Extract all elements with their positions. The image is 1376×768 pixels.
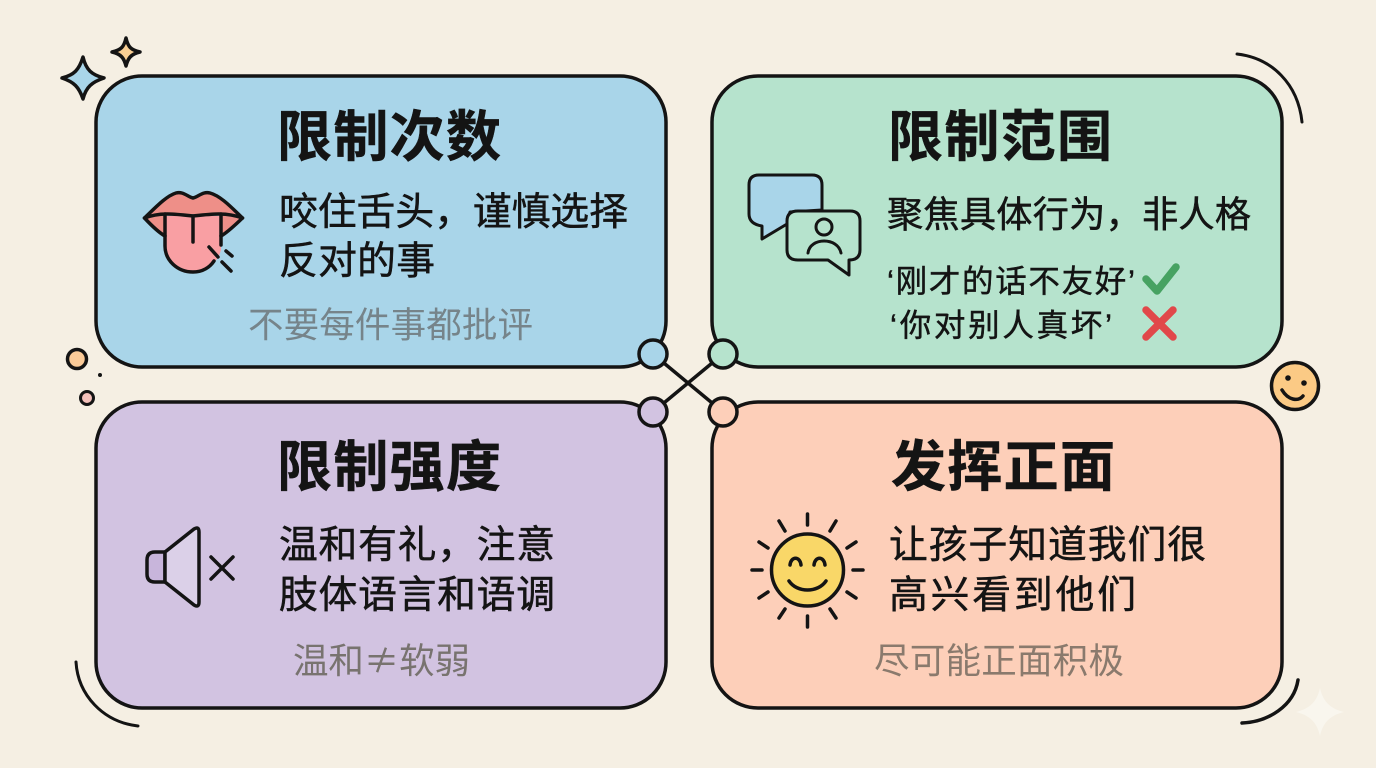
panel: 限制次数 (96, 76, 666, 367)
decoration: smiley (1272, 362, 1318, 410)
body text (279, 191, 628, 283)
heading: 限制范围: 限制范围 (888, 106, 1112, 168)
body text: 聚焦具体行为，非人格 (887, 194, 1251, 235)
panel: 限制强度 (96, 402, 666, 708)
decoration: orange sparkle (112, 38, 140, 66)
body text: 温和有礼，注意 (279, 524, 555, 567)
body text: 反对的事 (279, 240, 435, 283)
bad example with cross: ‘你对别人真坏’ (890, 307, 1112, 343)
body text: 咬住舌头，谨慎选择 (279, 191, 628, 234)
body text: 肢体语言和语调 (279, 574, 555, 617)
body text: 高兴看到他们 (889, 574, 1136, 617)
body text: 让孩子知道我们很 (889, 524, 1206, 567)
good example with check: ‘刚才的话不友好’ (887, 263, 1135, 299)
decoration: dots left (68, 350, 102, 404)
decoration: blue sparkle (62, 57, 104, 99)
heading: 限制强度: 限制强度 (277, 436, 501, 498)
body text (279, 524, 555, 617)
heading: 发挥正面: 发挥正面 (891, 436, 1115, 498)
footnote: 不要每件事都批评 (248, 305, 533, 345)
footnote: 温和≠软弱 (293, 633, 470, 684)
panel: 限制范围 (712, 76, 1282, 367)
icon: speech bubbles (749, 175, 860, 275)
icon: muted speaker (147, 528, 233, 606)
icon: cross mark (1146, 310, 1173, 337)
icon: check mark (1146, 267, 1176, 291)
icon: tongue and lips (144, 193, 242, 272)
body text (889, 524, 1206, 617)
panel: 发挥正面 (712, 402, 1282, 708)
decoration: bottom left arc (76, 662, 138, 726)
decoration: bottom right arc (1242, 680, 1298, 723)
decoration: top right arc (1237, 54, 1302, 122)
heading: 限制次数: 限制次数 (277, 106, 501, 168)
footnote: 尽可能正面积极 (874, 641, 1124, 681)
icon: smiling sun (752, 514, 863, 627)
connector: cross lines and nodes (639, 340, 737, 426)
decoration: pale sparkle (1296, 688, 1344, 736)
